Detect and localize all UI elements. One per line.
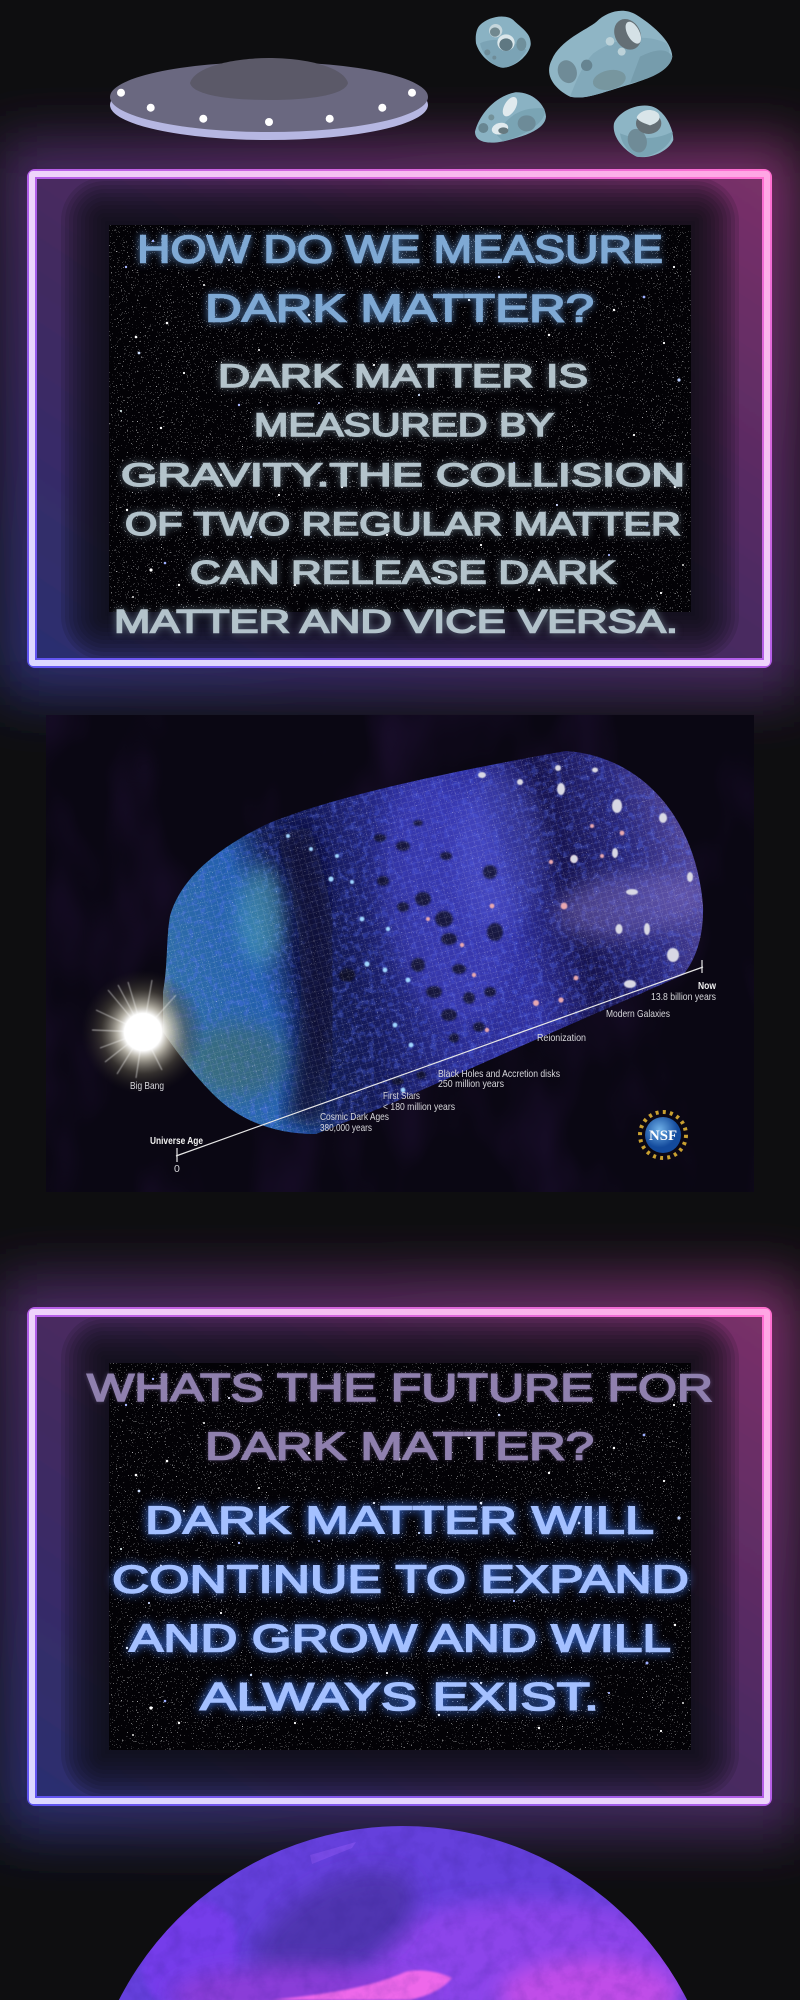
timeline labels: Modern Galaxies xyxy=(606,1008,670,1020)
body text: DARK MATTER WILL xyxy=(145,1500,654,1542)
asteroid: top left xyxy=(476,16,531,68)
body text: MATTER AND VICE VERSA. xyxy=(114,604,678,640)
timeline labels: 13.8 billion years xyxy=(651,991,716,1003)
body text: DARK MATTER IS xyxy=(218,358,588,394)
timeline labels: Now xyxy=(698,980,717,992)
body text: OF TWO REGULAR MATTER xyxy=(125,506,681,542)
panel: how do we measure dark matter xyxy=(0,142,800,696)
timeline labels xyxy=(130,980,717,1175)
heading: DARK MATTER? xyxy=(205,288,594,330)
heading: DARK MATTER? xyxy=(205,1426,594,1468)
icon: flying saucer xyxy=(110,58,428,140)
cylinder of cosmic history xyxy=(163,751,704,1134)
icon: asteroids xyxy=(475,11,673,157)
image: universe timeline xyxy=(46,715,754,1192)
timeline labels: < 180 million years xyxy=(383,1101,455,1113)
timeline labels: 0 xyxy=(174,1163,180,1175)
heading xyxy=(87,1367,713,1468)
timeline labels: First Stars xyxy=(383,1090,420,1102)
body text: GRAVITY.THE COLLISION xyxy=(121,457,685,493)
asteroid: lower right xyxy=(614,105,673,157)
timeline labels: 250 million years xyxy=(438,1078,504,1090)
big bang flash xyxy=(81,970,205,1094)
timeline labels: Reionization xyxy=(537,1032,586,1044)
reddish galaxies xyxy=(426,824,624,1032)
body text: MEASURED BY xyxy=(254,407,554,443)
timeline labels: Black Holes and Accretion disks xyxy=(438,1068,560,1080)
timeline axis xyxy=(176,960,703,1162)
body text xyxy=(112,1500,689,1719)
icon: NSF seal: NSF xyxy=(649,1128,677,1144)
starfield backdrop xyxy=(109,225,691,612)
body text: CONTINUE TO EXPAND xyxy=(112,1558,689,1602)
body text: AND GROW AND WILL xyxy=(129,1618,671,1660)
starfield backdrop xyxy=(109,1363,691,1750)
asteroid: large xyxy=(549,11,672,98)
timeline labels: 380,000 years xyxy=(320,1122,372,1134)
heading xyxy=(137,228,663,330)
dark matter clumps xyxy=(339,820,503,1085)
timeline labels: Cosmic Dark Ages xyxy=(320,1111,389,1123)
first stars xyxy=(286,834,413,1092)
body text: CAN RELEASE DARK xyxy=(190,554,616,590)
body text xyxy=(114,358,685,640)
heading: WHATS THE FUTURE FOR xyxy=(87,1367,713,1410)
modern galaxies xyxy=(478,765,693,988)
body text: ALWAYS EXIST. xyxy=(200,1676,599,1719)
timeline labels: Big Bang xyxy=(130,1080,164,1092)
icon: NSF seal xyxy=(640,1112,686,1158)
asteroid: lower left xyxy=(475,92,546,143)
panel: future of dark matter xyxy=(0,1280,800,1834)
icon: purple planet xyxy=(118,1826,688,2000)
frame: neon border xyxy=(32,1312,767,1801)
frame: neon border xyxy=(32,174,767,663)
heading: HOW DO WE MEASURE xyxy=(137,228,663,272)
timeline labels: Universe Age xyxy=(150,1135,203,1147)
